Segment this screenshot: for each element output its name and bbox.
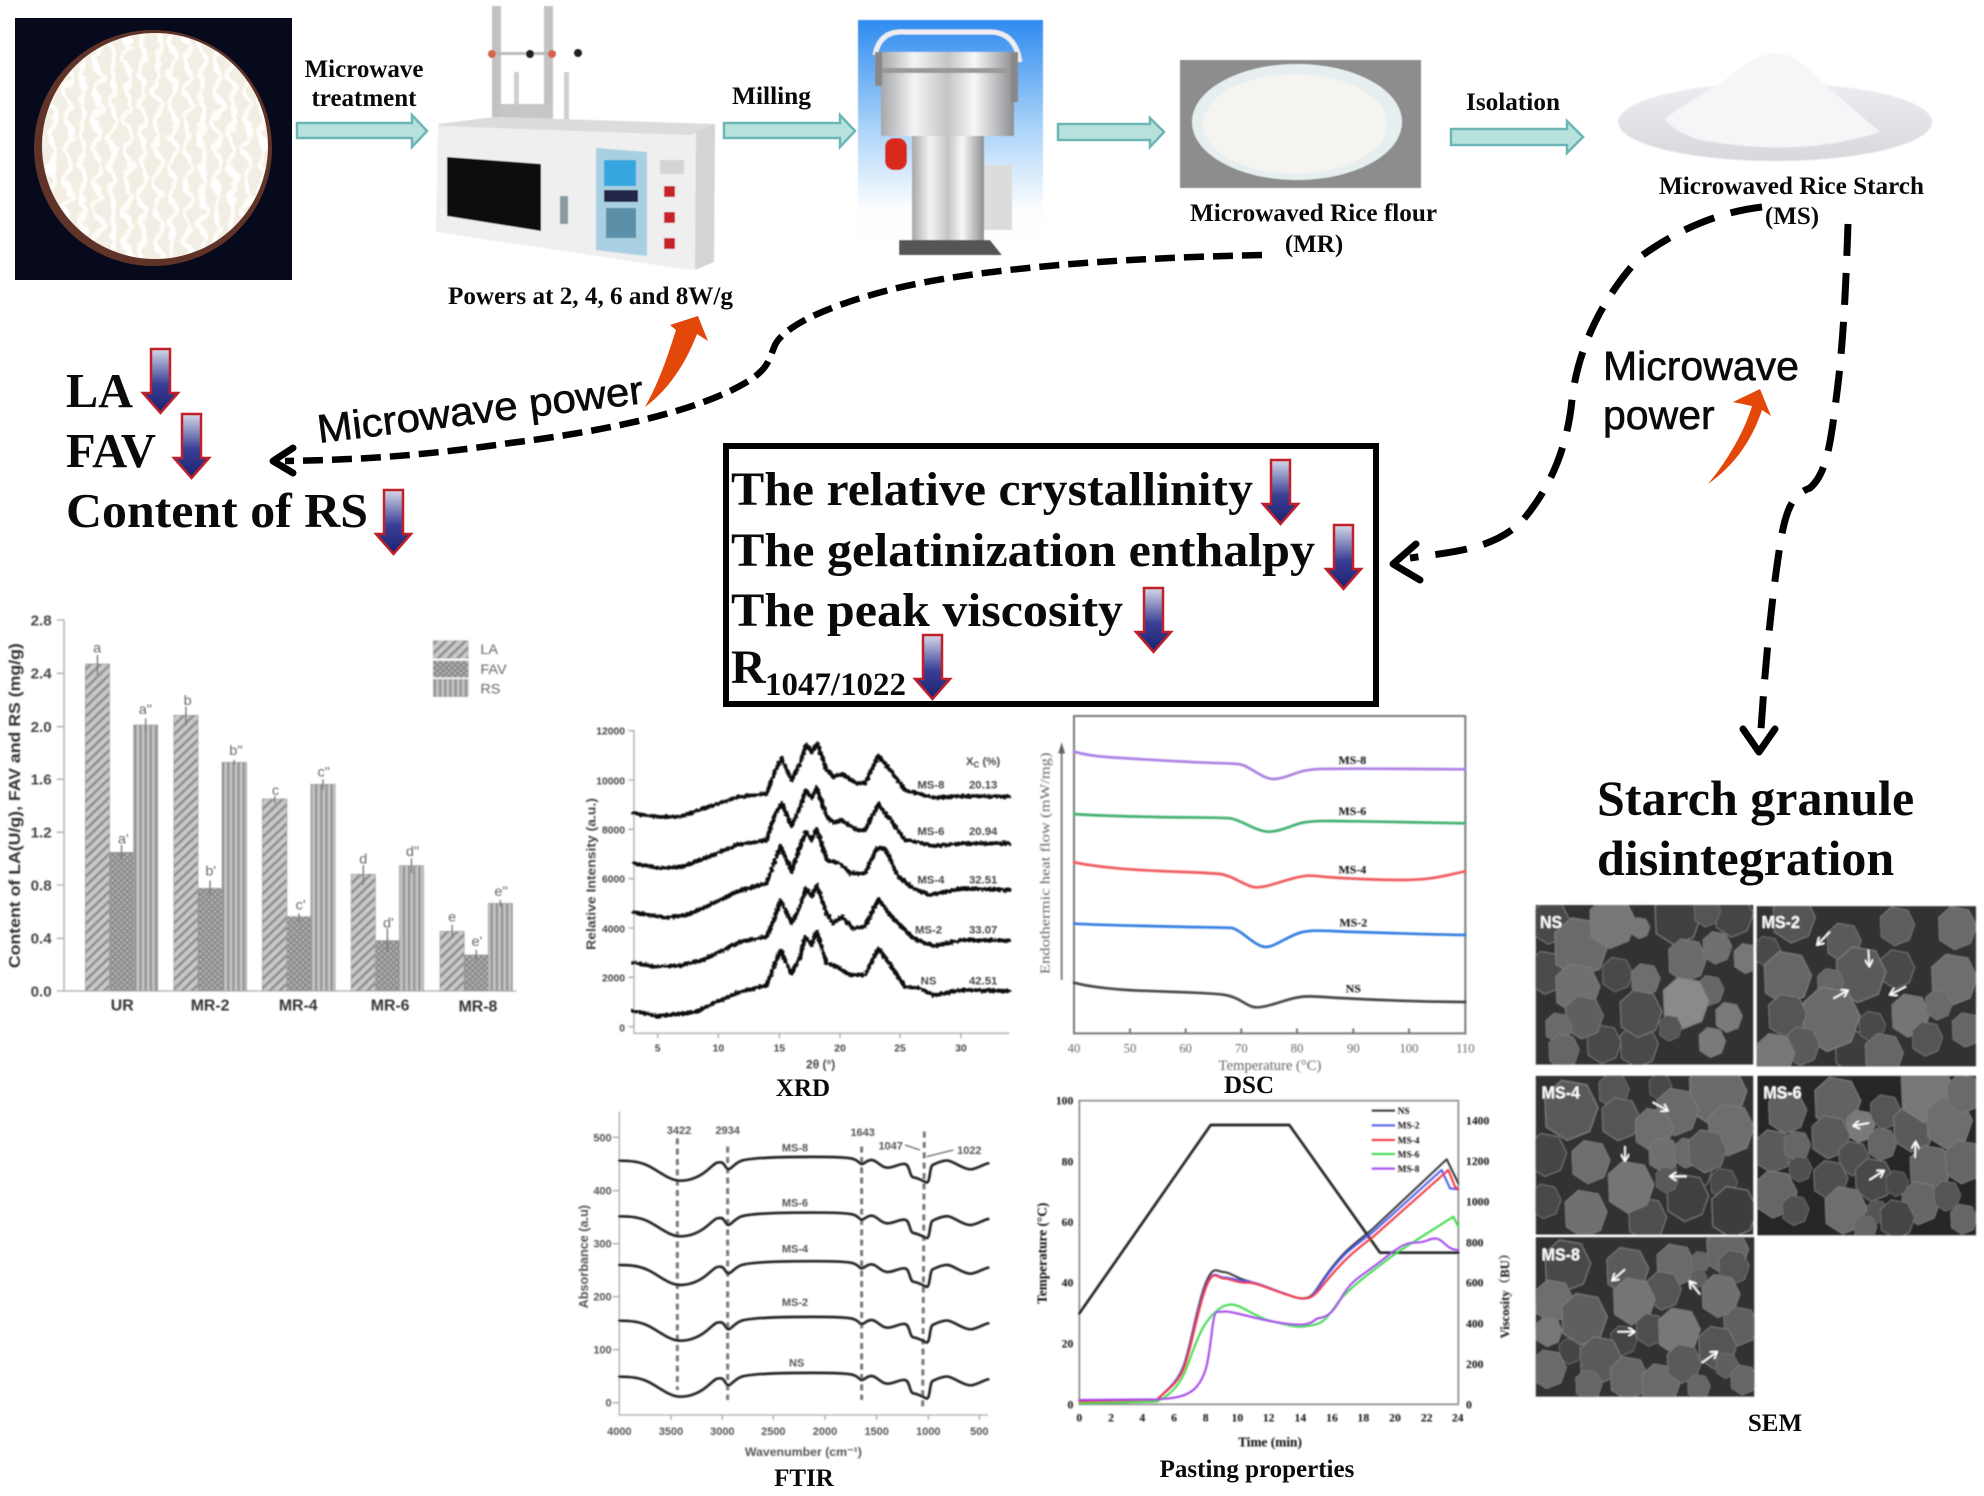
tick labels: 1400	[1466, 1115, 1489, 1128]
orange arrow: left microwave power	[645, 316, 708, 407]
panel: starch property box	[726, 446, 1376, 704]
series labels: MS-6	[1338, 804, 1366, 818]
series labels: 33.07	[969, 924, 997, 936]
tick labels: 100	[1400, 1042, 1418, 1056]
significance letters: a"	[139, 702, 152, 718]
series labels: X	[966, 756, 974, 768]
curves	[633, 743, 1009, 1016]
series labels: MS-8	[917, 779, 944, 791]
icon: down arrow viscosity	[1136, 588, 1171, 652]
tick labels: 80	[1291, 1042, 1303, 1056]
tick labels: 30	[955, 1044, 967, 1055]
y axis title: Content of LA(U/g), FAV and RS (mg/g)	[7, 643, 24, 968]
tick labels	[596, 726, 967, 1071]
labels: 1643	[850, 1127, 875, 1139]
label: powers: Powers at 2, 4, 6 and 8W/g	[448, 283, 734, 310]
text: LA FAV content of RS: Content of RS	[66, 483, 368, 538]
tick labels: 10000	[596, 776, 625, 787]
micrograph: MS-8	[1532, 1228, 1758, 1407]
tick labels: Temperature (°C)	[1219, 1058, 1322, 1074]
text: property list: The relative crystallinity	[731, 463, 1253, 516]
series labels: NS	[921, 975, 937, 987]
label: XRD: XRD	[776, 1075, 830, 1102]
label: milling: Milling	[732, 83, 811, 110]
series labels: 20.13	[969, 779, 997, 791]
significance letters: e"	[494, 884, 508, 900]
frame	[1074, 716, 1465, 1033]
dashed arrow: starch to box	[1393, 207, 1762, 580]
y tick labels: 0.4	[31, 932, 52, 948]
tick labels: 2	[1108, 1412, 1114, 1425]
labels	[577, 1125, 988, 1459]
y tick labels: 300	[593, 1239, 612, 1251]
line chart: XRD	[584, 726, 1009, 1071]
tick labels: 0	[1076, 1412, 1082, 1425]
significance letters: e	[448, 910, 456, 926]
tick labels: 14	[1295, 1412, 1306, 1425]
micrograph: NS: NS	[1540, 913, 1562, 932]
label: microwaved rice flour: Microwaved Rice flour	[1190, 200, 1437, 227]
label: isolation: Isolation	[1466, 89, 1560, 116]
legend: LA	[480, 642, 499, 658]
labels: 3000	[710, 1426, 735, 1438]
tick labels: 1200	[1466, 1155, 1489, 1168]
significance letters: b	[184, 693, 192, 709]
micrograph: MS-6	[1755, 1062, 1983, 1241]
tick labels: 0	[1466, 1398, 1472, 1411]
reference dashed lines	[677, 1132, 924, 1407]
heading: starch granule disintegration: disintegration	[1597, 830, 1894, 886]
labels: 3422	[667, 1125, 691, 1137]
micrograph: MS-2: MS-2	[1762, 913, 1800, 932]
line chart: FTIR	[577, 1112, 988, 1459]
legend: MS-8	[1398, 1165, 1420, 1175]
frame	[1079, 1101, 1458, 1404]
text: property list	[731, 463, 1315, 703]
labels: 3500	[659, 1426, 683, 1438]
y tick labels: 100	[593, 1345, 612, 1357]
micrograph: MS-4: MS-4	[1542, 1083, 1581, 1103]
tick labels	[1037, 752, 1475, 1074]
text: LA FAV content of RS: LA	[66, 363, 134, 418]
y tick labels: 0	[606, 1398, 612, 1410]
dashed arrow: starch to granules	[1743, 224, 1848, 752]
x tick labels: MR-8	[459, 999, 498, 1016]
photo: rice in a bowl	[15, 15, 292, 280]
y tick labels: 2.8	[31, 614, 52, 629]
micrograph: MS-2	[1754, 896, 1983, 1076]
tick labels: 10	[713, 1044, 724, 1055]
label: right microwave power: Microwave	[1603, 343, 1799, 389]
tick labels: 90	[1347, 1042, 1360, 1056]
significance letters: d"	[406, 844, 419, 860]
error bars	[97, 655, 500, 960]
micrograph: MS-6: MS-6	[1763, 1083, 1802, 1103]
legend: NS	[1398, 1107, 1410, 1117]
labels: MS-4	[782, 1244, 809, 1256]
y tick labels	[593, 1132, 612, 1410]
label: pasting properties: Pasting properties	[1160, 1456, 1355, 1483]
x tick labels: MR-2	[191, 998, 230, 1015]
tick labels: 16	[1326, 1412, 1338, 1425]
tick labels: 6000	[602, 875, 625, 886]
labels: 2934	[715, 1125, 741, 1137]
labels: Absorbance (a.u)	[577, 1205, 591, 1308]
text: property list: The gelatinization enthalpy	[731, 524, 1315, 577]
labels: 1047	[878, 1140, 903, 1152]
viscosity curves	[1079, 1159, 1458, 1403]
tick labels: Endothermic heat flow (mW/mg)	[1037, 752, 1052, 974]
line chart: pasting properties	[1035, 1095, 1512, 1450]
x tick labels: MR-4	[279, 998, 318, 1015]
tick labels: 8000	[602, 825, 625, 836]
series labels: MS-4	[917, 874, 945, 886]
text: property list: The peak viscosity	[731, 584, 1123, 637]
label: DSC: DSC	[1224, 1072, 1274, 1099]
tick labels: 1000	[1466, 1196, 1489, 1209]
axes	[613, 1112, 988, 1420]
bar chart: LA FAV RS	[7, 614, 517, 1016]
arrow: to flour	[1058, 118, 1164, 147]
axes	[57, 620, 517, 991]
label: right microwave power	[1603, 343, 1799, 438]
tick labels: 2θ (°)	[806, 1057, 835, 1071]
tick labels: 0	[619, 1024, 625, 1035]
y tick labels: 400	[593, 1186, 612, 1198]
micrograph: NS	[1529, 894, 1761, 1069]
label: right microwave power: power	[1603, 392, 1715, 438]
series labels: MS-2	[1339, 916, 1367, 930]
significance letters: e'	[472, 934, 482, 950]
legend: MS-2	[1398, 1122, 1420, 1132]
series labels: 32.51	[969, 874, 997, 886]
label: microwaved rice starch	[1659, 173, 1924, 230]
tick labels: 8	[1203, 1412, 1209, 1425]
curves	[619, 1157, 988, 1399]
icon: down arrow enthalpy	[1326, 525, 1361, 589]
significance letters: d	[359, 852, 367, 867]
tick labels: 18	[1358, 1412, 1369, 1425]
text: LA FAV content of RS	[66, 363, 368, 538]
legend	[1372, 1107, 1420, 1175]
series labels: 20.94	[969, 826, 998, 838]
icon: down arrow FAV	[174, 414, 209, 478]
photo: milling machine	[858, 20, 1043, 255]
series labels	[915, 756, 1000, 987]
tick labels: 15	[774, 1044, 785, 1055]
label: microwaved rice flour	[1190, 200, 1437, 258]
tick labels: 0	[1068, 1398, 1074, 1411]
labels: 500	[970, 1426, 988, 1438]
significance letters: b"	[229, 743, 242, 759]
significance letters: b'	[205, 864, 216, 880]
series labels: C	[974, 761, 980, 770]
line chart: DSC	[1037, 716, 1475, 1074]
tick labels: 4	[1139, 1412, 1145, 1425]
tick labels: 20	[1389, 1412, 1401, 1425]
labels: MS-6	[782, 1198, 808, 1210]
icon: down arrow LA	[143, 349, 178, 413]
labels: 1022	[957, 1145, 982, 1157]
icon: down arrow crystallinity	[1263, 460, 1298, 524]
y tick labels: 200	[593, 1292, 612, 1304]
labels: 4000	[607, 1426, 632, 1438]
heading: starch granule disintegration	[1597, 770, 1914, 886]
tick labels: 40	[1062, 1277, 1074, 1290]
text: property list: 1047/1022	[765, 667, 906, 703]
tick labels: 5	[655, 1044, 661, 1055]
series labels: NS	[1346, 982, 1361, 996]
tick labels: Temperature (°C)	[1035, 1203, 1050, 1304]
series labels: MS-2	[915, 924, 942, 936]
x tick labels	[111, 998, 498, 1016]
tick labels: 6	[1171, 1412, 1177, 1425]
tick labels: 110	[1456, 1042, 1475, 1056]
legend: MS-6	[1398, 1150, 1420, 1160]
arrow: milling	[724, 115, 855, 147]
micrograph: MS-8: MS-8	[1542, 1245, 1580, 1264]
tick labels: 12000	[596, 726, 625, 737]
label: microwaved rice flour: (MR)	[1285, 231, 1343, 258]
labels: MS-8	[782, 1143, 808, 1155]
tick labels: 40	[1068, 1042, 1080, 1056]
labels: 1500	[864, 1426, 889, 1438]
y tick labels	[31, 614, 52, 1000]
tick labels: 80	[1062, 1156, 1074, 1169]
dashed arrow: flour to left results	[273, 255, 1262, 473]
text: LA FAV content of RS: FAV	[66, 423, 156, 478]
x tick labels: MR-6	[371, 998, 410, 1015]
y tick labels: 2.0	[31, 720, 52, 736]
tick labels: 400	[1466, 1317, 1484, 1330]
significance letters: c	[272, 783, 279, 799]
icon: down arrow RS	[376, 490, 411, 554]
labels: 2500	[761, 1426, 786, 1438]
temperature profile	[1079, 1125, 1458, 1313]
axes	[628, 730, 1009, 1038]
photo: microwaved rice starch plate	[1618, 53, 1932, 161]
series labels: MS-6	[917, 826, 944, 838]
bars	[85, 664, 512, 991]
curves	[1074, 752, 1465, 1007]
series labels: MS-8	[1338, 753, 1366, 767]
tick labels: 12	[1263, 1412, 1275, 1425]
significance letters: a	[93, 641, 101, 657]
labels: 2000	[813, 1426, 837, 1438]
y direction arrow	[1059, 745, 1064, 980]
arrow: isolation	[1451, 121, 1583, 153]
tick labels: 800	[1466, 1236, 1484, 1249]
label: microwave treatment: treatment	[311, 85, 417, 112]
tick labels: 50	[1124, 1042, 1136, 1056]
labels: NS	[789, 1358, 804, 1370]
y tick labels: 0.8	[31, 879, 52, 894]
y tick labels: 1.2	[31, 826, 52, 842]
series labels: 42.51	[969, 975, 997, 987]
tick labels: 60	[1062, 1216, 1074, 1229]
arrow: microwave treatment	[297, 115, 427, 147]
results list: flour	[66, 349, 411, 554]
tick labels: 24	[1452, 1412, 1464, 1425]
tick labels: 70	[1235, 1042, 1248, 1056]
y tick labels: 1.6	[31, 773, 52, 789]
tick labels	[1035, 1095, 1512, 1450]
icon: down arrow ratio	[915, 635, 950, 699]
label: microwave treatment	[305, 56, 423, 112]
tick labels: 22	[1421, 1412, 1433, 1425]
y axis title: Relative Intensity (a.u.)	[584, 798, 598, 950]
tick labels: 20	[834, 1044, 846, 1055]
label: SEM: SEM	[1748, 1410, 1802, 1437]
series labels: (%)	[979, 756, 1000, 768]
significance letters: c"	[318, 765, 330, 781]
series labels: MS-4	[1338, 862, 1366, 876]
tick labels: 200	[1466, 1358, 1484, 1371]
y tick labels: 2.4	[31, 667, 52, 683]
legend	[433, 641, 507, 697]
x tick labels: UR	[111, 998, 134, 1015]
photo: microwaved rice flour plate	[1180, 60, 1421, 188]
label: microwaved rice starch: Microwaved Rice Starch	[1659, 173, 1924, 200]
y tick labels: 500	[593, 1132, 612, 1144]
orange arrow: right microwave power	[1708, 389, 1771, 484]
significance letters: d'	[383, 916, 394, 931]
text: property list: R	[731, 641, 767, 694]
labels: 1000	[916, 1426, 941, 1438]
photo: microwave apparatus	[436, 6, 715, 270]
y tick labels: 0.0	[31, 985, 52, 1000]
tick labels: 600	[1466, 1277, 1484, 1290]
significance letters: a'	[118, 832, 129, 847]
label: microwave treatment: Microwave	[305, 56, 423, 83]
legend: RS	[480, 682, 500, 697]
tick labels: 4000	[602, 924, 625, 935]
tick labels: 60	[1179, 1042, 1192, 1056]
tick labels: Time (min)	[1238, 1435, 1302, 1450]
label: microwaved rice starch: (MS)	[1765, 203, 1819, 230]
series labels	[1338, 753, 1367, 996]
tick labels: 25	[894, 1044, 906, 1055]
tick labels: 100	[1056, 1095, 1074, 1108]
labels: Wavenumber (cm⁻¹)	[745, 1445, 862, 1459]
label: microwave power rotated: Microwave power	[315, 368, 646, 452]
heading: starch granule disintegration: Starch granule	[1597, 770, 1914, 826]
tick labels: 20	[1062, 1338, 1074, 1351]
tick labels: Viscosity（BU）	[1498, 1248, 1512, 1338]
label: FTIR: FTIR	[774, 1465, 835, 1492]
significance letters	[93, 641, 508, 950]
labels: MS-2	[782, 1297, 808, 1309]
tick labels: 10	[1232, 1412, 1243, 1425]
legend: FAV	[480, 662, 507, 678]
significance letters: c'	[296, 898, 306, 913]
panel: SEM micrographs	[1529, 894, 1983, 1407]
micrograph: MS-4	[1529, 1062, 1757, 1241]
legend: MS-4	[1398, 1136, 1420, 1146]
tick labels: 2000	[602, 974, 625, 985]
